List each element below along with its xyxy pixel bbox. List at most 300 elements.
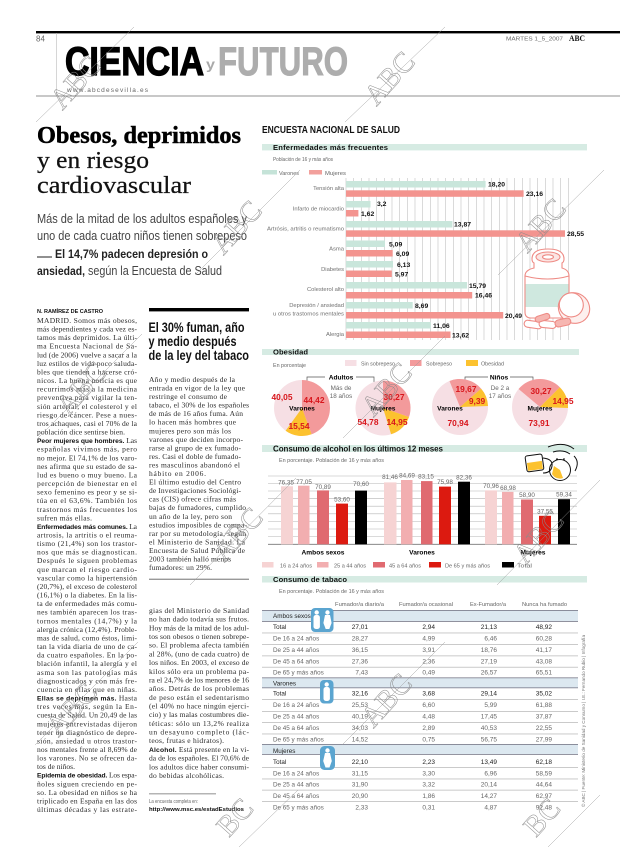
legend	[262, 170, 346, 177]
article column 1: (16,1%) o la diabetes. En la lis-	[37, 591, 138, 600]
bar values: 20,49	[505, 313, 522, 320]
watermarks: ABC	[40, 677, 104, 743]
article column 2: so. El problema afecta también	[149, 641, 249, 650]
category labels: u otros trastornos mentales	[273, 312, 344, 318]
sidebar body: rarse al grupo de ex fumado-	[149, 443, 242, 452]
sidebar body: varones que deciden incorpo-	[149, 435, 244, 444]
pie chart: boys: 9,39	[469, 396, 485, 406]
deck text: uno de cada cuatro niños tienen sobrepeso	[37, 229, 247, 243]
table group: both sexes: De 45 a 64 años	[273, 658, 319, 665]
sidebar body: Encuesta de Salud Pública de	[149, 546, 246, 555]
bar values: 68,98	[500, 485, 516, 492]
table group: women: De 25 a 44 años	[273, 782, 319, 789]
article column 1: preventiva para vigilar la ten-	[37, 393, 138, 402]
bar values: 28,55	[567, 231, 584, 238]
table group: men: 32,16	[352, 690, 368, 698]
section title: CIENCIA	[65, 40, 204, 84]
table group: men: 4,48	[422, 714, 435, 720]
unit note: En porcentaje. Población de 16 y más años	[279, 589, 384, 595]
pie chart: girls: 14,95	[553, 396, 574, 406]
category labels: Artrósis, artritis o reumatismo	[267, 226, 344, 232]
deck text: según la Encuesta de Salud	[88, 264, 222, 278]
table group: both sexes: 41,17	[536, 647, 552, 654]
table group: men: Total	[273, 690, 286, 698]
table group: both sexes: 2,94	[422, 624, 435, 631]
icon: man and woman	[311, 608, 334, 632]
table group: men	[262, 678, 578, 744]
table group: women: 6,96	[484, 770, 497, 777]
table group: both sexes: Total	[273, 624, 286, 631]
article column 1: que marcan el riesgo cardio-	[37, 565, 138, 574]
table group: both sexes: De 16 a 24 años	[273, 636, 319, 643]
table group: men: 34,03	[352, 725, 368, 732]
panel: tobacco consumption	[262, 575, 587, 811]
table group: women: 1,86	[422, 793, 435, 800]
article column 1: sión, ansiedad u otros trastor-	[37, 736, 138, 745]
column headers: Nunca ha fumado	[522, 602, 568, 608]
bar values: 77,05	[296, 479, 312, 486]
article column 1: cuesta de Salud. Un 20,49 de las	[37, 711, 137, 720]
watermarks: ABC	[205, 195, 269, 261]
panel heading: Enfermedades más frecuentes	[273, 143, 388, 152]
bar values: 1,62	[361, 211, 374, 218]
table group: men: 14,52	[352, 736, 368, 744]
table group: women: 20,14	[481, 782, 497, 789]
bar values	[278, 472, 572, 516]
sidebar body: bajas de fumadores, cumplido	[149, 503, 246, 512]
table group: women: De 65 y más años	[273, 804, 324, 811]
article column 1: ma Encuesta Nacional de Sa-	[37, 342, 138, 351]
sidebar body: entrada en vigor de la ley que	[149, 384, 246, 392]
article column 1: Epidemia de obesidad. Los espa-	[37, 771, 138, 780]
article column 1: mujeres entrevistadas dijeron	[37, 719, 137, 728]
category labels: Asma	[329, 246, 345, 252]
article column 1: (20,7%), el exceso de colesterol	[37, 582, 137, 591]
article column 1: MADRID. Somos más obesos,	[37, 316, 137, 325]
article column 1: nes también aparecen los tras-	[37, 608, 138, 617]
article column 1: tornos mentales (14,7%) y la	[37, 616, 138, 625]
bars: women	[485, 490, 570, 544]
table group: both sexes: 27,36	[352, 658, 368, 665]
bar values: 18,20	[488, 182, 505, 188]
bar values: 84,69	[399, 472, 415, 480]
deck text: El 14,7% padecen depresión o	[55, 247, 208, 261]
article column 1: luz estilos de vida poco saluda-	[37, 359, 138, 368]
pie chart: boys: 19,67	[456, 384, 477, 394]
bar values: 6,09	[396, 251, 409, 258]
table group: women: De 45 a 64 años	[273, 793, 319, 800]
bar values: 5,09	[389, 242, 402, 248]
table group: men: 6,60	[422, 702, 435, 709]
table group: women: Total	[273, 759, 286, 766]
pie chart: boys: Varones	[437, 406, 463, 412]
table group: men: 37,87	[536, 714, 552, 720]
table group: men: 27,99	[536, 736, 552, 744]
table group: women: 2,23	[422, 759, 435, 766]
date: MARTES 1_5_2007	[506, 36, 563, 42]
grid lines	[268, 476, 577, 544]
legend: Sin sobrepeso	[361, 362, 396, 368]
article column 1: sión arterial, el colesterol y el	[37, 402, 137, 411]
legend: De 65 y más años	[445, 564, 490, 570]
group labels: Mujeres	[521, 550, 546, 556]
sidebar body: hábito en 2006.	[149, 469, 206, 478]
section title second word: FUTURO	[218, 40, 348, 84]
panel heading: Obesidad	[273, 348, 308, 356]
article column 1: blación infantil, la alergia y el	[37, 659, 137, 668]
bars: women	[346, 190, 565, 338]
legend: Total	[517, 564, 532, 570]
article column 2: gias del Ministerio de Sanidad	[149, 606, 249, 615]
sidebar body: lo hacen más hombres que	[149, 418, 237, 427]
pie chart: boys	[432, 379, 488, 435]
sidebar body	[149, 375, 249, 572]
table group: men: 25,53	[352, 702, 368, 709]
source link note	[149, 794, 244, 813]
article column 2: los adultos dice haber consumi-	[149, 762, 250, 771]
sidebar body: el Ministerio de Sanidad. La	[149, 537, 246, 546]
table group: men: Varones	[273, 680, 296, 688]
article column 1: trastornos más frecuentes los	[37, 505, 137, 514]
article column 1: nicos. La buena noticia es que	[37, 376, 138, 385]
sidebar headline: El 30% fuman, año	[148, 320, 244, 335]
sidebar headline	[148, 320, 249, 363]
group labels: Varones	[409, 550, 435, 556]
adults bracket: Más de	[331, 385, 352, 392]
row separators	[262, 632, 578, 802]
article column 2: al 28%, (uno de cada cuatro) de	[149, 649, 250, 658]
article column 1: nos mentales frente al 8,69% de	[37, 745, 138, 754]
table group: men: De 45 a 64 años	[273, 725, 319, 732]
table group: men: De 25 a 44 años	[273, 714, 319, 720]
table group: both sexes: 3,91	[422, 647, 435, 654]
article column 1: Enfermedades más comunes. La	[37, 522, 138, 531]
section title connector: y	[206, 56, 215, 72]
article column 1: españolas vivimos más, pero	[37, 445, 137, 454]
table group: both sexes: 65,51	[536, 670, 552, 677]
unit note: En porcentaje. Población de 16 y más años	[279, 458, 384, 464]
table group: both sexes: 6,46	[484, 636, 497, 643]
table group: women: 31,90	[352, 782, 368, 789]
page number: 84	[36, 34, 45, 44]
table group: women: 4,87	[484, 804, 497, 811]
sidebar body: de Investigaciones Sociológi-	[149, 486, 242, 495]
table group: women: 62,97	[536, 793, 552, 800]
article column 1: los varones. No se ofrecen da-	[37, 754, 138, 763]
article column 2: do bebidas alcohólicas.	[149, 771, 224, 780]
article column 1: cuencia en ellas que en niñas.	[37, 685, 137, 694]
legend: Mujeres	[325, 171, 346, 177]
article column 1: asma son las patologías más	[37, 668, 137, 677]
table group: women: 3,32	[422, 782, 435, 789]
pie chart: girls: 30,27	[531, 386, 552, 396]
watermarks: ABC	[44, 50, 108, 116]
article column 2: un desayuno completo (lác-	[149, 728, 250, 737]
bar values: 59,34	[556, 492, 572, 498]
table group: both sexes: 60,28	[536, 636, 552, 643]
bar values: 53,60	[334, 496, 350, 504]
article column 2: Hoy más de la mitad de los adul-	[149, 623, 250, 632]
table group: women: 2,33	[355, 804, 368, 811]
pie chart: adult men	[272, 380, 330, 436]
pie chart: boys: 70,94	[448, 418, 469, 428]
sidebar body: restringe el consumo de	[149, 392, 228, 401]
website: www.abcdesevilla.es	[66, 87, 149, 94]
pie chart: adult men: Varones	[289, 406, 315, 412]
sidebar body: res. Casi el doble de fumado-	[149, 452, 242, 461]
article column 1: tismo (21,4%) son los trastor-	[37, 539, 138, 548]
column headers: Fumador/a ocasional	[399, 602, 453, 608]
category labels: Infarto de miocardio	[293, 206, 344, 212]
table group: both sexes: 18,76	[481, 647, 497, 654]
table group: women: 14,27	[481, 793, 497, 800]
table group: both sexes: 48,92	[536, 624, 552, 631]
bars: men	[346, 181, 486, 328]
deck text	[37, 212, 248, 278]
sidebar headline: y medio después	[148, 334, 236, 349]
group labels	[302, 550, 546, 556]
table group: men: 61,88	[536, 702, 552, 709]
table group: both sexes: De 25 a 44 años	[273, 647, 319, 654]
table group: women: 44,64	[536, 782, 552, 789]
article column 2: no han dado todavía sus frutos.	[149, 615, 249, 624]
pie chart: adult women: Mujeres	[371, 406, 396, 412]
sidebar body: rar por su metodología, según	[149, 529, 246, 538]
table group: women: Mujeres	[273, 748, 295, 755]
table group: both sexes: 2,36	[422, 658, 435, 665]
table group: men: 40,19	[352, 714, 368, 720]
watermarks: BC	[517, 793, 567, 843]
article column 1: so. La obesidad en niños se ha	[37, 788, 138, 797]
article column 1: alergia crónica (12,4%). Proble-	[37, 625, 138, 634]
table group: men: 17,45	[481, 714, 497, 720]
article column 2: téticas: sólo un 13,2% realiza	[149, 719, 250, 728]
table group: women: 58,59	[536, 770, 552, 777]
table group: women: 62,18	[536, 759, 552, 766]
article column 1: artrosis, la artritis o el reuma-	[37, 530, 138, 540]
article column 1: vascular como la hipertensión	[37, 573, 137, 582]
sidebar headline: de la ley del tabaco	[148, 348, 249, 363]
table group: men: De 16 a 24 años	[273, 702, 319, 709]
legend: Varones	[279, 171, 299, 177]
article column 1: Ellas se deprimen más. Hasta	[37, 694, 138, 702]
adults bracket: 18 años	[330, 393, 352, 400]
article column 2: kilos sólo era un problema pa-	[149, 667, 250, 676]
table group: men: 2,89	[422, 725, 435, 732]
table group: both sexes: 21,13	[481, 624, 497, 631]
table group: both sexes: 28,27	[352, 636, 368, 643]
pie chart: girls: Mujeres	[528, 406, 553, 412]
children bracket: 17 años	[489, 393, 511, 400]
bar values: 70,60	[353, 481, 369, 488]
bar values: 11,06	[433, 323, 450, 330]
sidebar body: de más de 16 años fuma. Aún	[149, 409, 243, 418]
bar values: 70,96	[483, 483, 499, 490]
article column 1: triplicado en España en las dos	[37, 796, 137, 806]
article column 1: más dependientes y cada vez es-	[37, 325, 138, 334]
adults bracket	[307, 374, 374, 400]
article column 2: años. Detrás de los problemas	[149, 684, 249, 693]
article column 1: tros achaques, casi el 70% de la	[37, 419, 138, 428]
table group: women	[262, 744, 578, 811]
article column 1: tos de niños.	[37, 762, 75, 771]
sidebar body: estudios imposibles de compa-	[149, 520, 248, 529]
table group: men: 5,99	[484, 702, 497, 709]
legend: 45 a 64 años	[389, 564, 421, 570]
bars: both sexes	[281, 486, 367, 544]
children bracket: De 2 a	[491, 385, 510, 392]
bar values: 75,98	[437, 479, 453, 486]
category labels	[267, 186, 345, 338]
article column 1: tres veces más, según la En-	[37, 702, 138, 711]
table group: men: 40,53	[481, 725, 497, 732]
table group: women: 92,48	[536, 804, 552, 811]
vertical credit: © ABC | Fuente: Ministerio de Sanidad y Consumo | I.E.: Fernando Rubio | Infografía	[580, 635, 587, 807]
watermarks: ABC	[206, 502, 270, 568]
bar values: 81,46	[382, 474, 398, 481]
table group: both sexes: De 65 y más años	[273, 670, 324, 677]
article column 1: Peor mujeres que hombres. Las	[37, 436, 137, 445]
legend	[262, 562, 532, 570]
legend: 25 a 44 años	[334, 564, 366, 570]
article column 1: población dice sentirse bien.	[37, 428, 125, 436]
legend: Sobrepeso	[426, 362, 453, 368]
article column 1	[37, 316, 138, 814]
bar values: 70,89	[315, 484, 331, 491]
table group: women: 22,10	[352, 759, 368, 766]
article column 1: ta de enfermedades más comu-	[37, 599, 138, 608]
bar values: 15,79	[469, 283, 486, 290]
sidebar body: fumadores: un 29%.	[149, 563, 212, 572]
source link note: La encuesta completa en:	[149, 799, 198, 805]
icon: drunk face with glass	[525, 444, 577, 480]
article column 1: percepción de bienestar en el	[37, 479, 137, 488]
bar values: 8,69	[415, 303, 428, 310]
article column 1: últimas décadas y las estrate-	[37, 805, 138, 814]
bar values: 16,46	[475, 292, 492, 300]
table group: both sexes	[262, 610, 578, 677]
panel: obesity	[262, 348, 579, 436]
table group: women: 31,15	[352, 770, 368, 777]
table group: both sexes: Ambos sexos	[273, 613, 311, 620]
watermarks: ABC	[50, 356, 114, 422]
category labels: Colesterol alto	[307, 287, 344, 293]
column headers: Ex-Fumador/a	[470, 602, 507, 608]
article column 1: ñoles siguen creciendo en pe-	[37, 779, 138, 788]
table group: men: De 65 y más años	[273, 736, 324, 744]
bar values: 13,62	[452, 332, 469, 340]
unit note: En porcentaje	[273, 363, 307, 369]
article column 1: tener un diagnóstico de depre-	[37, 728, 138, 737]
category labels: Tensión alta	[313, 186, 345, 192]
legend: Obesidad	[481, 362, 504, 368]
bar values: 6,13	[397, 262, 410, 269]
bar values: 58,90	[519, 492, 535, 499]
table group: women: 20,90	[352, 793, 368, 800]
table group: both sexes: 26,57	[481, 670, 497, 677]
panel: most frequent diseases	[262, 143, 596, 340]
article column 2: da de los españoles. El 70,6% de	[149, 754, 250, 763]
article column 1: diagnosticados y con más fre-	[37, 676, 138, 685]
grid lines	[346, 178, 568, 340]
article column 2: (el 40% no hace ningún ejerci-	[149, 702, 250, 710]
pie chart: adult women	[356, 380, 411, 436]
article column 2: teos, frutas e hidratos).	[149, 736, 224, 745]
watermarks: ABC	[358, 46, 422, 112]
article column 1: tamos más deprimidos. La últi-	[37, 333, 138, 342]
watermarks: ABC	[507, 505, 571, 571]
article column 1: sexo femenino es peor y se si-	[37, 488, 138, 497]
bar values: 13,87	[454, 222, 471, 228]
bar values: 3,2	[377, 201, 387, 208]
children bracket	[465, 374, 533, 400]
main headline	[37, 123, 241, 199]
table group: men: 56,75	[481, 736, 497, 744]
panel heading: Consumo de tabaco	[273, 575, 347, 584]
table group: men: 29,14	[481, 690, 497, 698]
article column 2: cio) y las malas costumbres die-	[149, 710, 250, 719]
infographic title: ENCUESTA NACIONAL DE SALUD	[262, 124, 400, 136]
sidebar body: El último estudio del Centro	[149, 478, 241, 487]
article column 2	[149, 606, 250, 780]
icon: man	[320, 680, 334, 704]
category labels: Diabetes	[321, 267, 344, 273]
deck text: ansiedad,	[37, 264, 85, 278]
article column 1: túa en el 63,6%. También los	[37, 496, 137, 505]
article column 2: los niños. En 2003, el exceso de	[149, 658, 250, 667]
article column 1: lud es bueno o muy bueno. La	[37, 470, 138, 479]
category labels: Alergia	[326, 332, 345, 338]
icon: pill bottle	[524, 249, 596, 329]
article column 1: Después le siguen problemas	[37, 556, 137, 565]
table group: both sexes: 0,49	[422, 670, 435, 677]
pie chart: adult women: 30,27	[384, 392, 405, 402]
article column 1: nes afirma que su estado de sa-	[37, 462, 138, 471]
legend	[345, 360, 504, 368]
adults bracket: Adultos	[329, 374, 354, 382]
table group: women: De 16 a 24 años	[273, 770, 319, 777]
sidebar body: 2003 también halló menos	[149, 554, 231, 564]
bar values: 37,55	[537, 508, 553, 516]
watermarks: ABC	[355, 357, 419, 423]
bar values: 5,97	[395, 272, 408, 278]
table group: both sexes: 27,01	[352, 624, 368, 631]
group labels: Ambos sexos	[302, 550, 345, 556]
article column 1: lud (de 2006) vuelve a sacar a la	[37, 350, 138, 359]
pie chart: girls: 73,91	[529, 418, 550, 428]
article column 2: de peso están el sedentarismo	[149, 693, 249, 702]
sidebar: tobacco article	[148, 308, 249, 580]
article column 1: nos que más se diagnostican.	[37, 548, 137, 557]
table group: women: 3,30	[422, 770, 435, 777]
category labels: Depresión / ansiedad	[289, 303, 344, 309]
icon: woman	[320, 746, 335, 770]
main headline: Obesos, deprimidos	[37, 123, 241, 149]
table group: men: 22,55	[536, 725, 552, 732]
children bracket: Niños	[490, 374, 508, 382]
population note: Población de 16 y más años	[273, 157, 333, 163]
article column 1: bles que tienden a hacerse cró-	[37, 368, 138, 376]
column headers: Fumador/a diario/a	[335, 602, 385, 608]
table group: men: 0,75	[422, 736, 435, 744]
deck text: Más de la mitad de los adultos españoles y	[37, 212, 248, 226]
table group: both sexes: 43,08	[536, 658, 552, 665]
newspaper logo: ABC	[569, 33, 585, 43]
panel heading: Consumo de alcohol en los últimos 12 meses	[273, 444, 444, 454]
sidebar body: Año y medio después de la	[149, 375, 236, 384]
sidebar body: cas (CIS) ofrece cifras más	[149, 495, 236, 504]
bar values: 23,16	[526, 191, 543, 198]
